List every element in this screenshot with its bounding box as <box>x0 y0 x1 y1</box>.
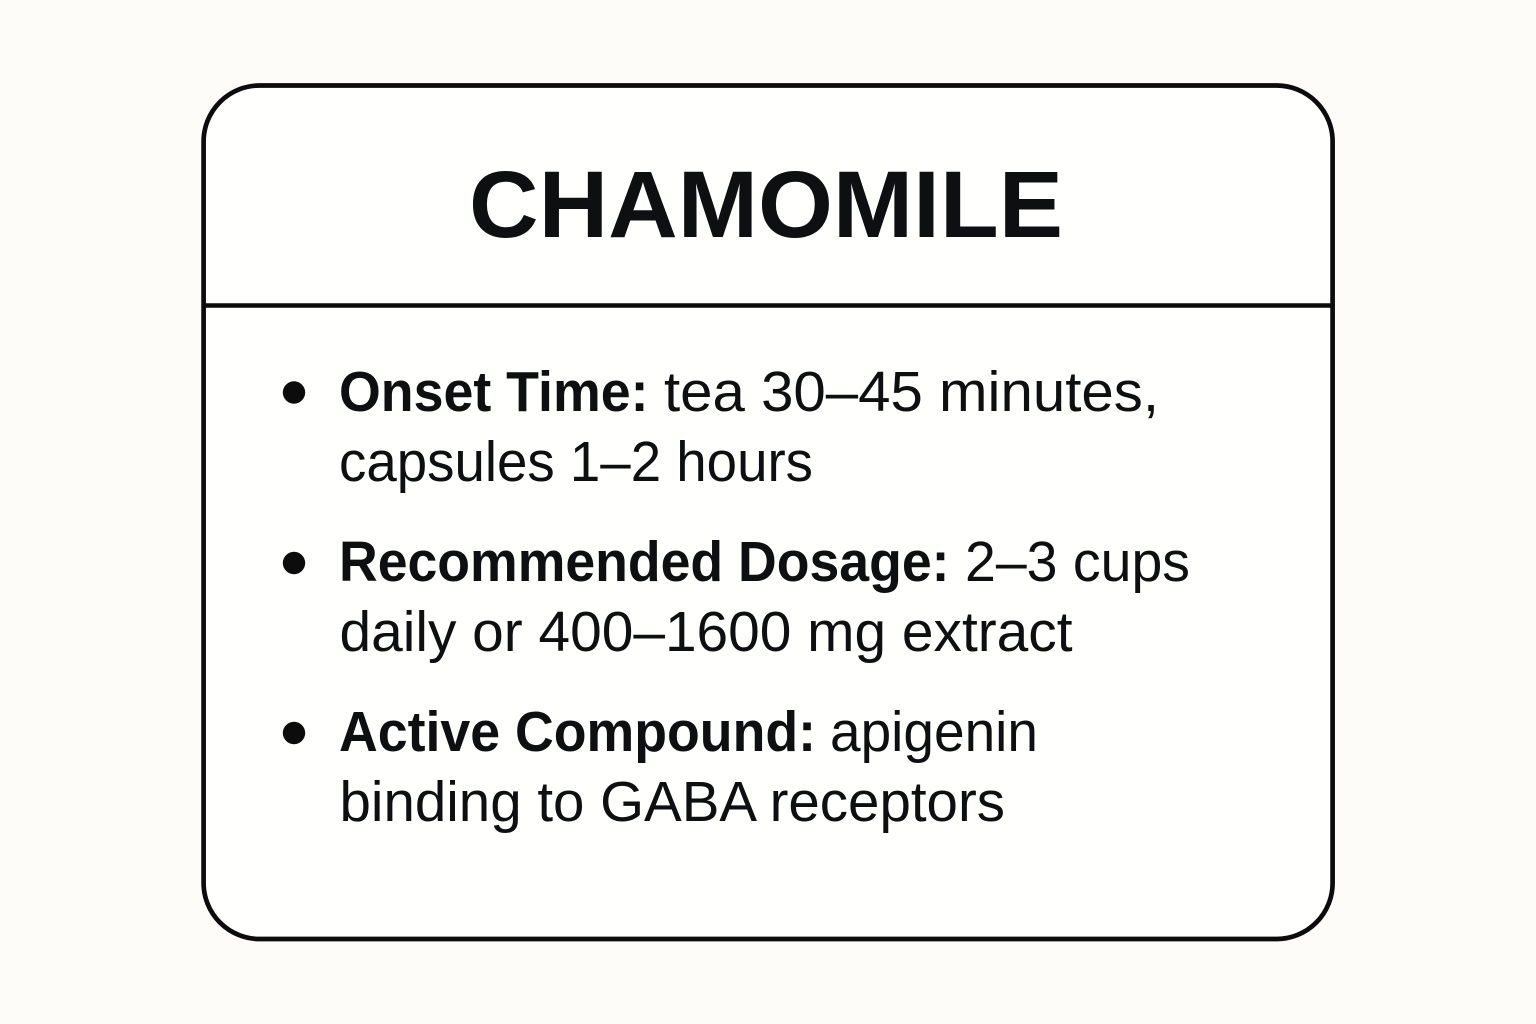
bullet: onset time <box>283 360 1159 494</box>
bullet: recommended dosage: Recommended Dosage: <box>339 530 950 594</box>
bullet: onset time: capsules 1–2 hours <box>339 430 813 494</box>
bullet: recommended dosage <box>283 530 1190 664</box>
bullet: onset time: Onset Time: <box>339 360 648 424</box>
bullet: active compound <box>283 700 1038 834</box>
bullet: recommended dosage: 2–3 cups <box>965 530 1190 594</box>
panel: chamomile card <box>204 86 1333 939</box>
bullet: active compound: apigenin <box>830 700 1038 764</box>
bullet: onset time: tea 30–45 minutes, <box>664 360 1159 424</box>
title: CHAMOMILE <box>469 152 1063 258</box>
bullet: active compound: binding to GABA receptors <box>340 770 1005 834</box>
bullet: active compound: Active Compound: <box>339 700 816 764</box>
bullet: recommended dosage: daily or 400–1600 mg extract <box>340 600 1073 664</box>
